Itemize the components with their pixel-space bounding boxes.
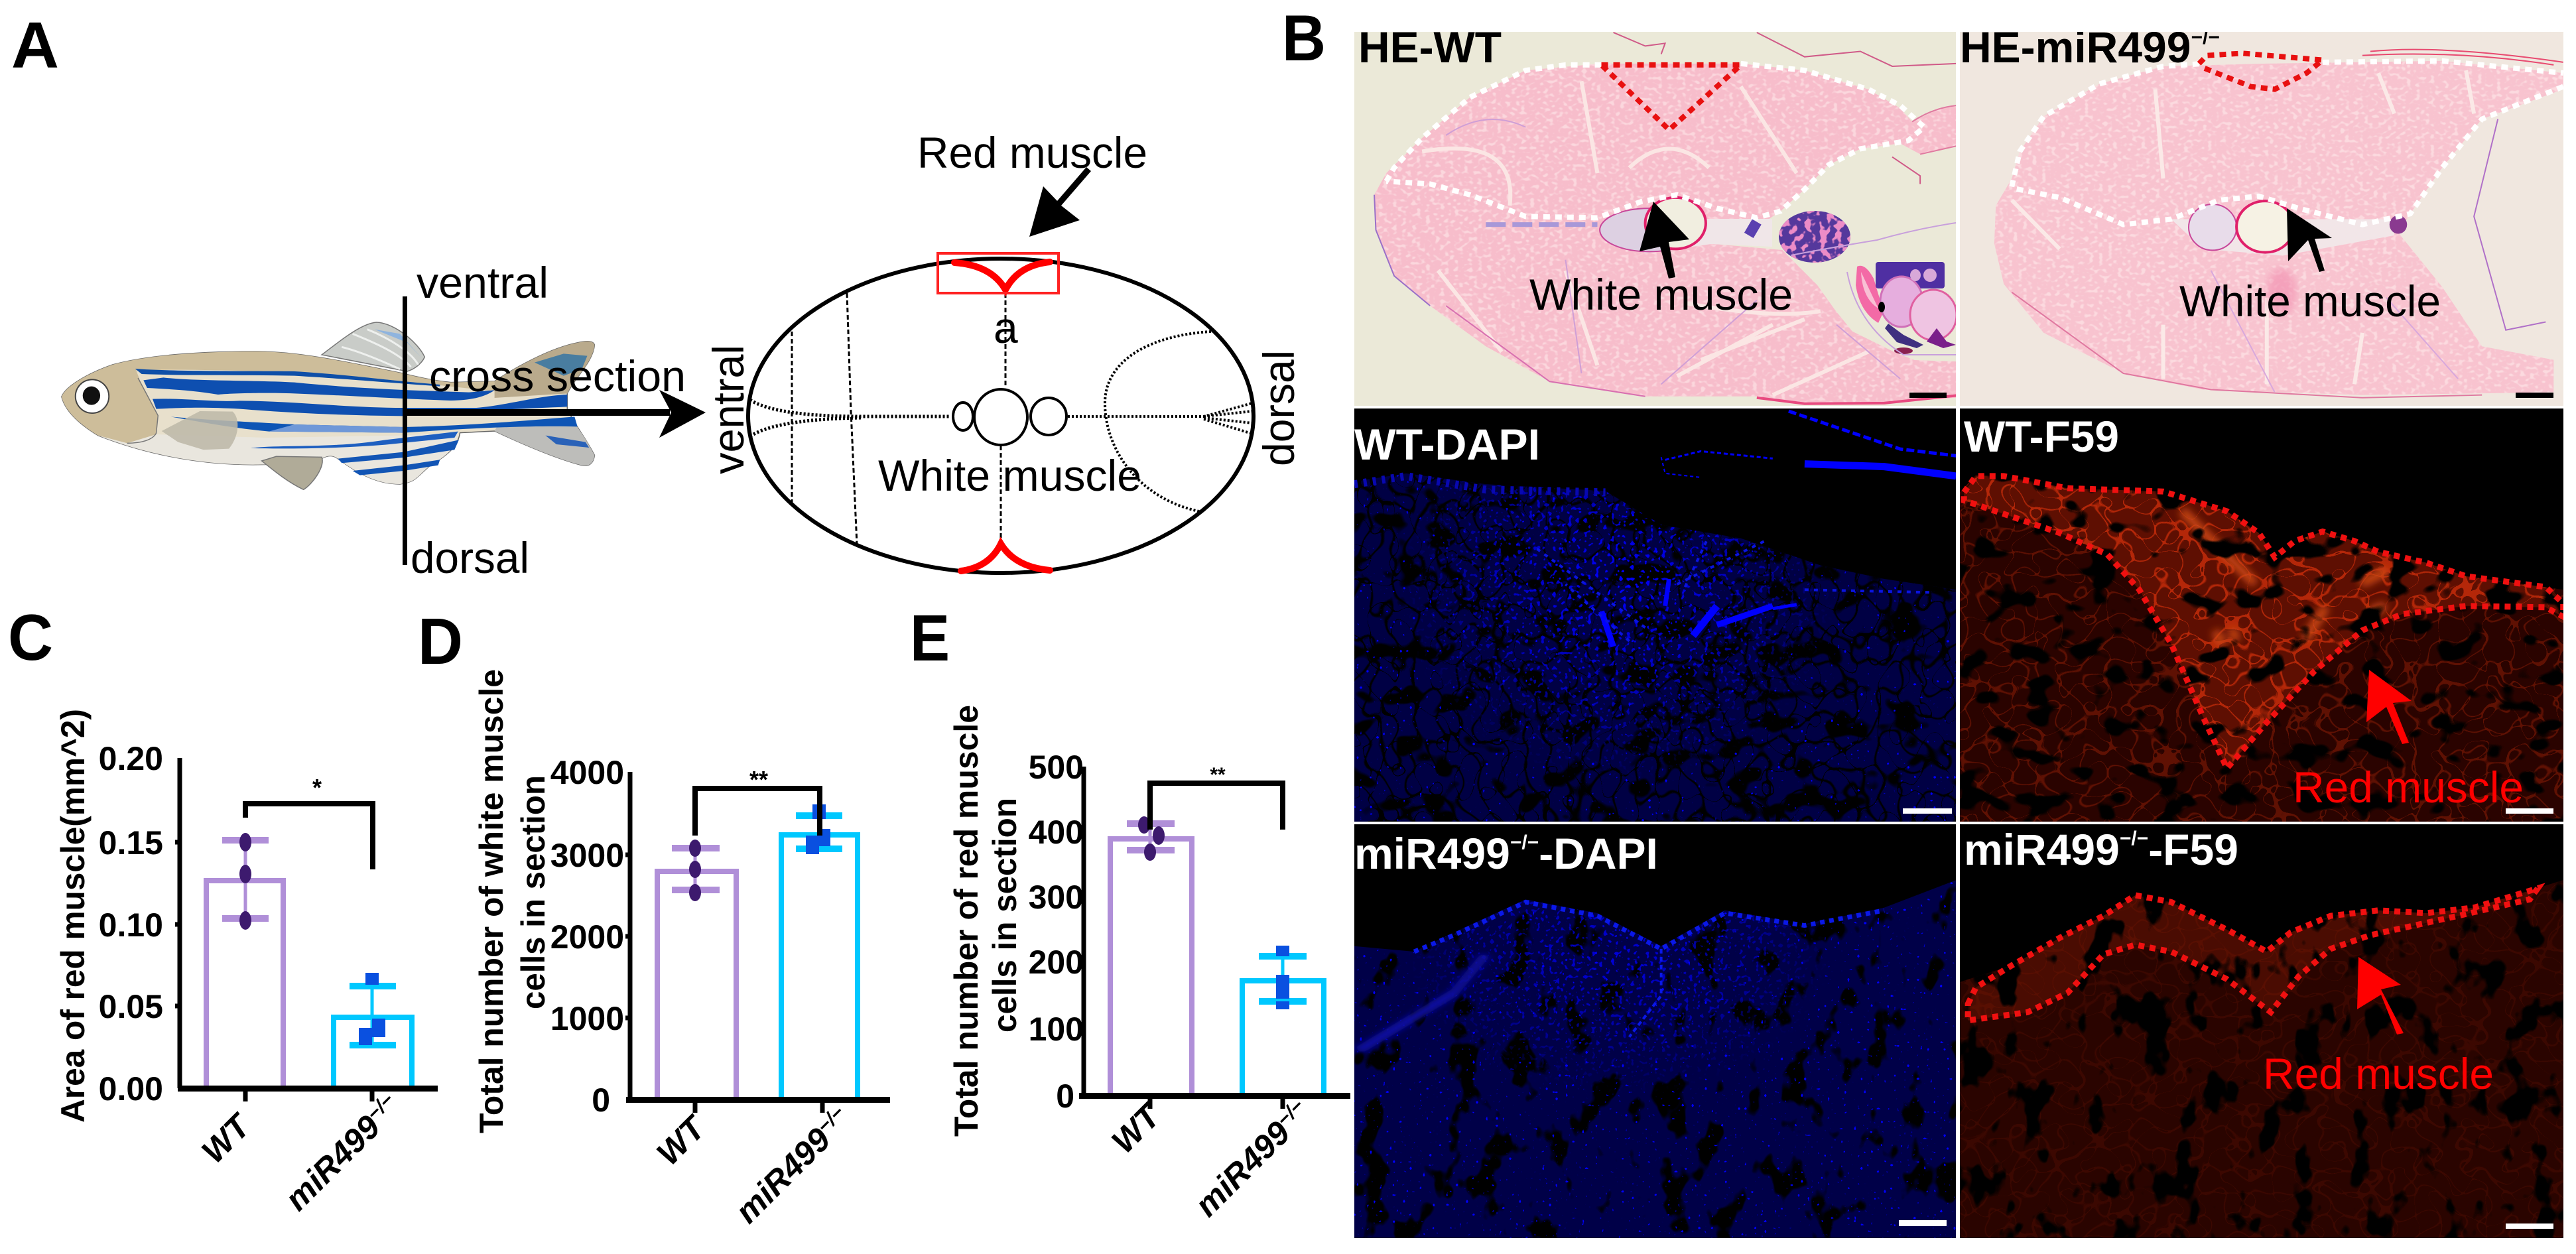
error bars bbox=[1127, 824, 1307, 1001]
illustration: zebrafish bbox=[62, 322, 594, 489]
red dashed outline bbox=[1602, 65, 1741, 130]
y ticks: 0.00 bbox=[99, 1070, 163, 1107]
y ticks: 500 bbox=[1029, 749, 1084, 786]
myosepta dotted lines bbox=[750, 293, 1252, 544]
panel letter A: A bbox=[11, 9, 59, 82]
x labels: −/− bbox=[1273, 1095, 1309, 1131]
y axis title: Area of red muscle(mm^2) bbox=[54, 709, 92, 1123]
scale bar bbox=[2506, 808, 2553, 814]
panel: HE-miR499 micrograph bbox=[1960, 23, 2563, 406]
label: HE-WT bbox=[1358, 23, 1502, 72]
panel A: fish and cross section schematic bbox=[11, 9, 1303, 582]
y axis title bbox=[948, 705, 1023, 1137]
white dashed outline bbox=[1386, 64, 1924, 218]
y ticks: 2000 bbox=[550, 918, 624, 956]
significance bracket bbox=[245, 804, 373, 869]
y ticks: 4000 bbox=[550, 754, 624, 791]
red muscle bottom bbox=[961, 544, 1050, 571]
y axis title: Total number of white muscle bbox=[473, 669, 510, 1133]
section line bbox=[403, 296, 407, 565]
label: HE-miR499 bbox=[1960, 23, 2191, 72]
arrow: red muscle bbox=[1029, 167, 1091, 237]
tissue bbox=[1354, 408, 1956, 822]
bright ridge bbox=[1358, 902, 1884, 1050]
panel: WT-F59 micrograph bbox=[1960, 408, 2563, 822]
y ticks: 200 bbox=[1029, 944, 1084, 981]
data points bbox=[239, 833, 385, 1045]
scale bar bbox=[1903, 808, 1952, 814]
notochord circles bbox=[953, 403, 973, 430]
arrow bbox=[2357, 957, 2404, 1035]
y ticks: 0 bbox=[592, 1082, 610, 1119]
x labels: miR499 bbox=[278, 1108, 387, 1218]
red dashed outline bbox=[2199, 53, 2323, 90]
label: −/− bbox=[2191, 27, 2220, 48]
label: miR499 bbox=[1964, 825, 2120, 874]
panel letter B: B bbox=[1282, 1, 1326, 74]
y ticks bbox=[550, 754, 624, 1119]
panel: miR499 DAPI micrograph bbox=[1354, 824, 1956, 1238]
y ticks: 400 bbox=[1029, 814, 1084, 851]
panel letter D: D bbox=[418, 605, 463, 678]
label: dorsal: dorsal bbox=[411, 533, 529, 582]
y ticks bbox=[1029, 749, 1084, 1115]
x labels: WT bbox=[649, 1107, 714, 1172]
label: -DAPI bbox=[1539, 829, 1658, 878]
y ticks: 0.20 bbox=[99, 740, 163, 777]
label: red muscle: Red muscle bbox=[917, 128, 1147, 177]
chart D: white muscle cells bbox=[418, 605, 890, 1230]
significance star: * bbox=[312, 774, 322, 801]
data points bbox=[689, 804, 830, 901]
chart C: area of red muscle bbox=[8, 601, 438, 1218]
x labels bbox=[194, 1088, 408, 1218]
y ticks: 0.05 bbox=[99, 988, 163, 1025]
red box bbox=[938, 253, 1059, 293]
axes bbox=[175, 758, 372, 1101]
scale bar bbox=[2506, 1223, 2553, 1229]
data points bbox=[1138, 816, 1289, 1009]
y axis title bbox=[473, 669, 552, 1133]
bright nuclei tracks bbox=[1354, 411, 1956, 647]
label: −/− bbox=[2120, 828, 2148, 849]
x labels bbox=[1104, 1094, 1318, 1223]
organs bbox=[1374, 32, 1957, 404]
y axis title: cells in section bbox=[515, 775, 552, 1009]
scale bar bbox=[1909, 393, 1947, 398]
x labels: WT bbox=[194, 1105, 259, 1170]
scale bar bbox=[1899, 1220, 1947, 1226]
y ticks: 300 bbox=[1029, 879, 1084, 916]
label: white muscle: White muscle bbox=[878, 451, 1141, 500]
panel letter C: C bbox=[8, 601, 53, 674]
organs bbox=[2012, 50, 2563, 398]
y ticks: 1000 bbox=[550, 1000, 624, 1037]
label: white muscle: White muscle bbox=[1529, 270, 1793, 319]
arrow: to cross section bbox=[405, 390, 706, 438]
cross section diagram bbox=[748, 253, 1254, 573]
tissue bbox=[1354, 824, 1956, 1238]
bars bbox=[206, 881, 412, 1088]
significance stars: ** bbox=[749, 766, 768, 793]
tissue bbox=[1960, 824, 2563, 1238]
white dashed outline bbox=[2012, 61, 2563, 225]
significance stars: ** bbox=[1210, 764, 1226, 786]
red dotted outline bbox=[1968, 889, 2538, 1021]
error bars bbox=[672, 816, 842, 890]
y ticks: 0.10 bbox=[99, 907, 163, 944]
y ticks bbox=[99, 740, 163, 1107]
label: −/− bbox=[1510, 832, 1539, 853]
axes bbox=[1079, 767, 1283, 1109]
label: cross section: cross section bbox=[429, 351, 686, 401]
nerve and vein outlines bbox=[1791, 223, 1956, 355]
y ticks: 0.15 bbox=[99, 824, 163, 861]
tissue bbox=[1374, 64, 1956, 403]
x labels: −/− bbox=[813, 1101, 849, 1137]
x labels bbox=[649, 1100, 858, 1230]
panel letter E: E bbox=[910, 601, 950, 674]
arrow bbox=[1640, 202, 1689, 279]
arrow bbox=[2366, 670, 2412, 744]
bars bbox=[657, 835, 858, 1099]
tissue bbox=[1960, 408, 2563, 822]
significance bracket bbox=[1150, 783, 1283, 830]
x labels: miR499 bbox=[1188, 1114, 1297, 1223]
y ticks: 3000 bbox=[550, 837, 624, 874]
label: -F59 bbox=[2148, 825, 2238, 874]
label: dorsal rotated: dorsal bbox=[1254, 350, 1303, 466]
y axis title: cells in section bbox=[986, 798, 1023, 1033]
axes bbox=[625, 772, 822, 1113]
x labels: WT bbox=[1104, 1096, 1169, 1160]
label: red muscle: Red muscle bbox=[2263, 1049, 2494, 1098]
y ticks: 100 bbox=[1029, 1011, 1084, 1048]
panel: miR499 F59 micrograph bbox=[1960, 824, 2563, 1238]
label: white muscle: White muscle bbox=[2179, 277, 2441, 326]
chart E: red muscle cells bbox=[910, 601, 1350, 1223]
error bars bbox=[222, 840, 396, 1045]
scale bar bbox=[2516, 393, 2553, 398]
y axis title: Total number of red muscle bbox=[948, 705, 985, 1137]
label: WT-DAPI bbox=[1354, 420, 1540, 469]
label: ventral: ventral bbox=[417, 258, 548, 307]
bars bbox=[1110, 839, 1324, 1096]
label: red muscle: Red muscle bbox=[2293, 763, 2524, 812]
label: miR499 bbox=[1354, 829, 1510, 878]
x labels: miR499 bbox=[728, 1121, 838, 1230]
red muscle top bbox=[954, 262, 1050, 290]
arrow bbox=[2287, 208, 2332, 272]
gonad bbox=[1856, 262, 1957, 354]
outline ellipse bbox=[748, 259, 1254, 573]
panel: WT-DAPI micrograph bbox=[1354, 408, 1956, 822]
y ticks: 0 bbox=[1056, 1078, 1074, 1115]
significance bracket bbox=[695, 788, 820, 836]
label a: a bbox=[994, 303, 1018, 352]
kidney lobe bbox=[1779, 211, 1850, 263]
x labels: −/− bbox=[363, 1089, 399, 1125]
label: ventral rotated: ventral bbox=[704, 345, 753, 474]
tissue bbox=[1994, 61, 2563, 395]
label: WT-F59 bbox=[1964, 412, 2119, 461]
panel: HE-WT micrograph bbox=[1354, 23, 1957, 406]
red dotted outline bbox=[1964, 476, 2563, 769]
